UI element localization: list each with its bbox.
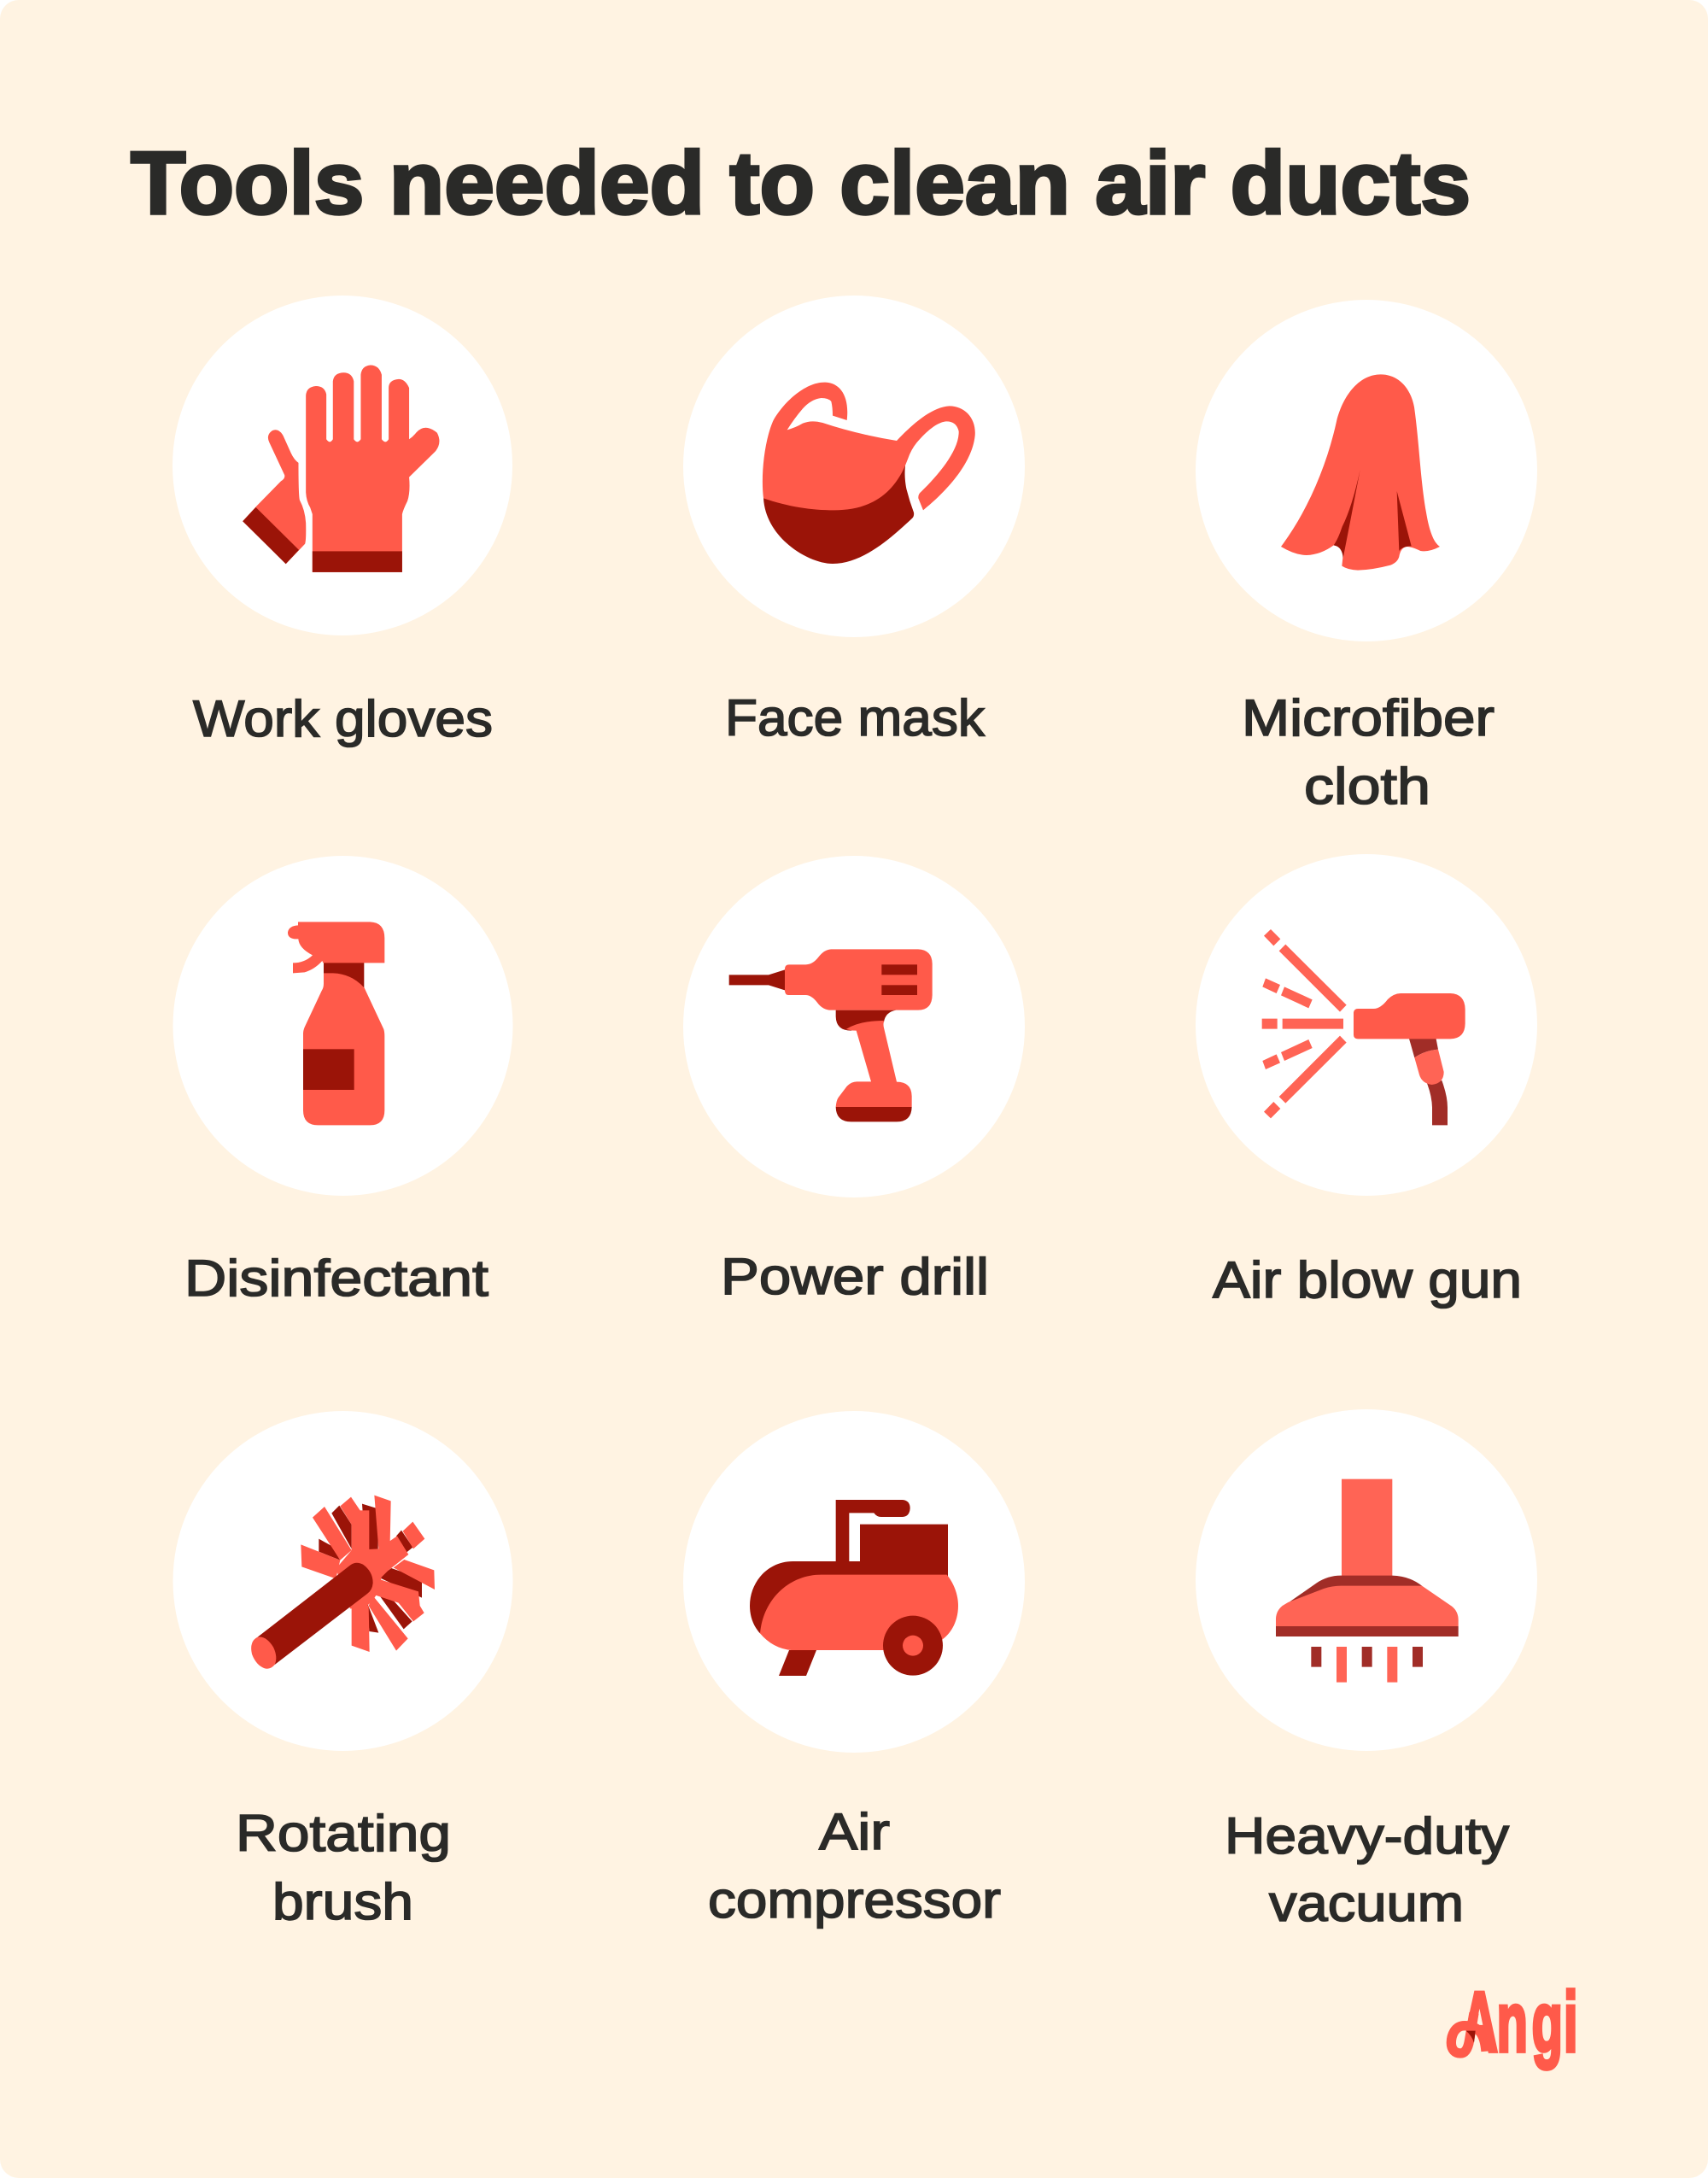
label: heavy-duty vacuum [1225,1807,1509,1932]
circle: power drill [683,856,1025,1197]
circle: air blow gun [1196,854,1537,1196]
tool: heavy-duty vacuum [1196,1409,1537,1932]
circle: face mask [683,296,1025,637]
label: microfiber cloth: Microfiber [1242,689,1494,746]
label: air compressor: compressor [708,1871,1001,1929]
icon: air compressor [750,1500,958,1676]
icon: work gloves [243,366,439,572]
label: power drill: Power drill [721,1248,989,1305]
circle: air compressor [683,1411,1025,1753]
icon: face mask [763,383,975,564]
label: heavy-duty vacuum: Heavy-duty [1225,1807,1509,1865]
label: air blow gun: Air blow gun [1213,1251,1522,1309]
icon: microfiber cloth [1281,374,1440,571]
label: microfiber cloth [1242,689,1494,815]
circle: rotating brush [173,1411,512,1751]
label: rotating brush: brush [272,1873,413,1930]
icon: spray bottle [288,922,384,1125]
label: microfiber cloth: cloth [1304,758,1430,815]
tool: work gloves [173,296,512,747]
circle: microfiber cloth [1196,300,1537,641]
circle: disinfectant [173,856,512,1196]
label: disinfectant: Disinfectant [184,1250,488,1307]
icon: air blow gun [1262,929,1465,1125]
tool: air blow gun [1196,854,1537,1309]
label: heavy-duty vacuum: vacuum [1269,1875,1464,1932]
label: rotating brush: Rotating [236,1805,451,1862]
label: work gloves: Work gloves [193,690,493,747]
logo: Angi: Angi [1461,1976,1578,2070]
tool: face mask [683,296,1025,746]
icon: rotating brush [251,1496,435,1669]
icon: power drill [729,949,933,1121]
label: face mask: Face mask [725,689,986,746]
label: air compressor [708,1803,1001,1929]
title: Tools needed to clean air ducts [131,134,1471,233]
label: rotating brush [236,1805,451,1930]
tool: power drill [683,856,1025,1305]
tool: air compressor [683,1411,1025,1929]
circle: heavy-duty vacuum [1196,1409,1537,1751]
tool: microfiber cloth [1196,300,1537,815]
label: air compressor: Air [819,1803,890,1860]
circle: work gloves [173,296,512,635]
tool: rotating brush [173,1411,512,1930]
icon: heavy-duty vacuum [1276,1479,1459,1683]
tool: disinfectant [173,856,512,1307]
